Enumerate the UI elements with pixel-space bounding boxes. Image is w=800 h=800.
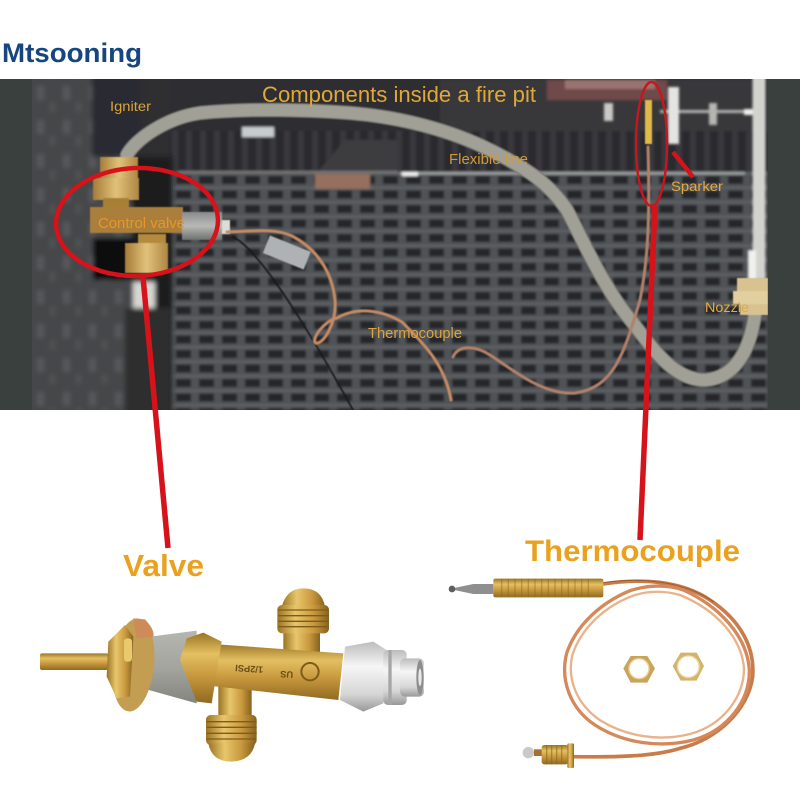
- heading: Valve: Valve: [123, 548, 204, 583]
- photo heading: Components inside a fire pit: [262, 82, 536, 107]
- brand title: Mtsooning: [2, 38, 142, 68]
- control valve fittings: [90, 157, 230, 273]
- stamped marks: 1/2PSI: [235, 663, 263, 675]
- side bands of photo: [0, 79, 800, 410]
- threaded sensor body: [449, 579, 603, 597]
- arrow line: valve: [143, 277, 168, 548]
- photo scene: [24, 70, 768, 418]
- copper coil: [565, 580, 753, 757]
- callout ellipse: control valve: [54, 165, 220, 279]
- brass bottom port: [206, 683, 257, 762]
- stamped marks: [235, 663, 319, 680]
- callout ellipse: thermocouple: [636, 82, 667, 206]
- flexible line hose: [127, 110, 756, 380]
- bolts and white fittings: [604, 70, 760, 285]
- label: thermocouple: Thermocouple: [368, 326, 462, 342]
- label: flexible line: Flexible line: [449, 152, 528, 168]
- chrome ferrule: [383, 650, 424, 705]
- brass top port: [277, 588, 329, 657]
- mounting flange: [107, 616, 159, 714]
- label: nozzle: Nozzle: [705, 299, 749, 315]
- brass nut left: [623, 656, 655, 683]
- label: igniter: Igniter: [110, 99, 152, 114]
- brass collar: [180, 633, 222, 703]
- zinc housing: [137, 631, 197, 703]
- label: sparker: Sparker: [671, 178, 723, 194]
- valve stem: [40, 653, 108, 670]
- brass nut right: [673, 653, 704, 681]
- sparker pointer: [673, 152, 693, 177]
- wire tag: [263, 235, 311, 270]
- panel: fire pit photo: [0, 70, 800, 418]
- product: valve: [40, 588, 424, 762]
- stamped marks: US: [280, 669, 293, 680]
- label: control valve: Control valve: [98, 216, 185, 232]
- connector: [523, 743, 574, 768]
- arrow line: thermocouple: [640, 206, 655, 540]
- thermocouple wire in photo: [227, 100, 652, 410]
- nozzle fitting: [733, 278, 768, 315]
- product: thermocouple: [449, 579, 753, 768]
- brass body: [203, 643, 343, 700]
- chrome nut: [340, 642, 387, 712]
- heading: Thermocouple: Thermocouple: [525, 535, 740, 568]
